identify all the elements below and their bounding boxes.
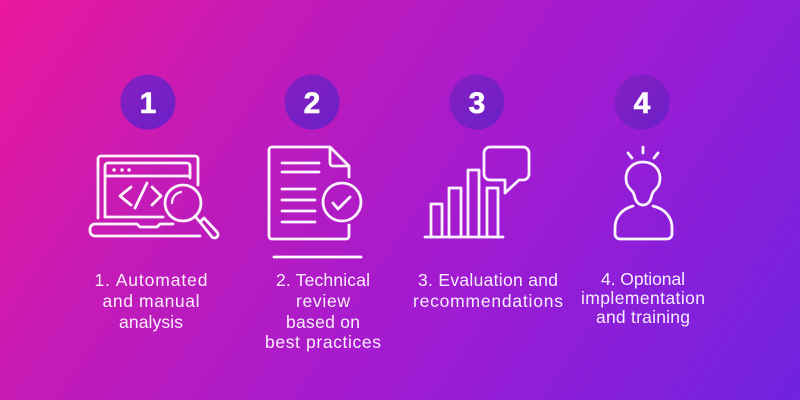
label 4: and training (596, 307, 690, 327)
number badge 3: 3 (469, 87, 485, 120)
step 4 (581, 74, 705, 327)
number badge 2: 2 (304, 87, 320, 120)
label 3: recommendations (413, 291, 563, 311)
step 2 (265, 74, 381, 352)
step 1 (90, 74, 218, 332)
label 4: 4. Optional (601, 269, 685, 289)
label 2: based on (286, 312, 360, 332)
icon: person with lightbulb head (615, 147, 672, 239)
icon: document with check mark (269, 147, 361, 239)
icon: bar chart with speech bubble (425, 147, 529, 237)
label 4: implementation (581, 288, 705, 308)
step 3 (413, 74, 563, 311)
number badge 1 (120, 74, 176, 130)
number badge 3 (450, 74, 504, 130)
number badge 2 (284, 74, 340, 130)
label 1: analysis (119, 312, 183, 332)
label 2: review (296, 291, 350, 311)
number badge 4: 4 (634, 87, 651, 120)
label 1: and manual (102, 291, 200, 311)
number badge 1: 1 (140, 87, 156, 120)
label 2: best practices (265, 332, 381, 352)
icon: laptop with code and magnifier (90, 156, 218, 238)
label 1: 1. Automated (94, 270, 208, 290)
underline (274, 256, 361, 258)
label 3: 3. Evaluation and (418, 270, 558, 290)
number badge 4 (614, 74, 670, 130)
label 2: 2. Technical (276, 270, 370, 290)
